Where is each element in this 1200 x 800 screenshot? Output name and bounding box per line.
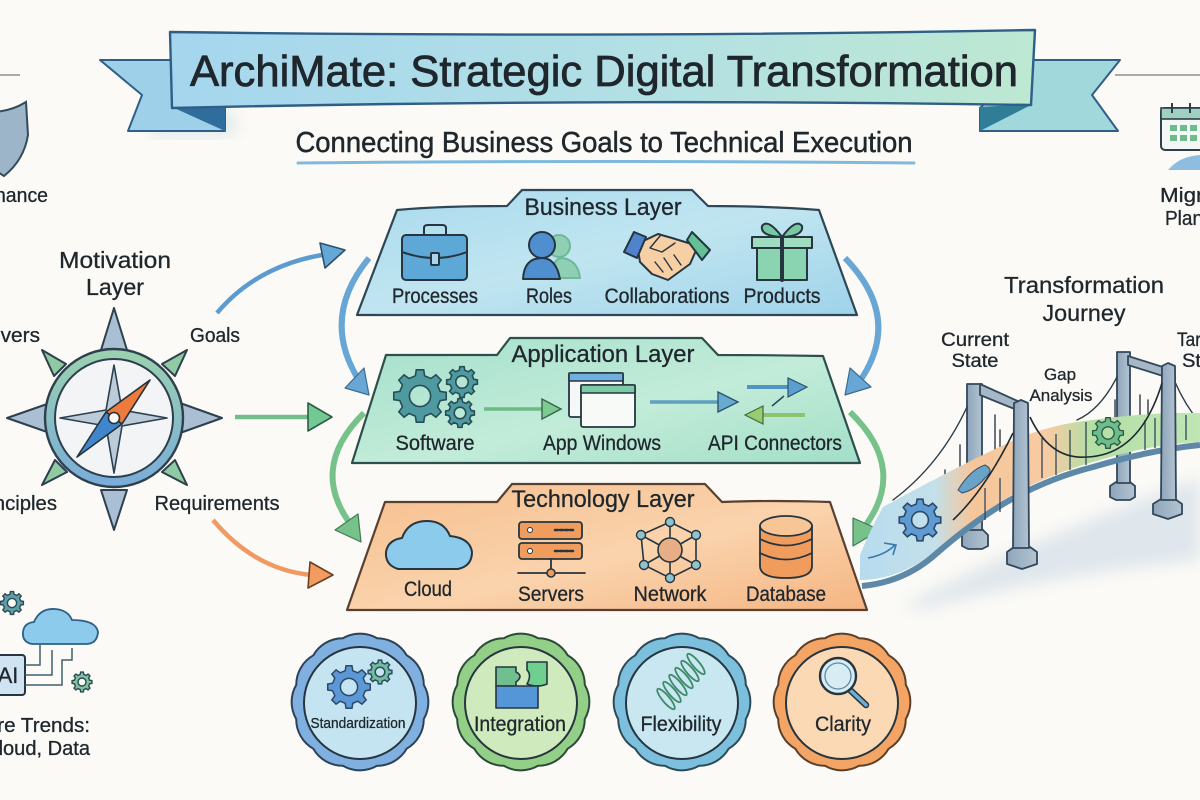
icon: compass bbox=[7, 308, 222, 530]
business labels: Products bbox=[744, 285, 820, 308]
journey heading bbox=[1004, 272, 1164, 326]
back suspension cables bbox=[893, 377, 1200, 525]
banner fold right bbox=[980, 104, 1033, 131]
label: gap analysis: Gap bbox=[1044, 365, 1076, 384]
front towers bbox=[1007, 363, 1182, 569]
panel: migration planning (cropped, top right) bbox=[1160, 103, 1200, 230]
label: current state: Current bbox=[941, 330, 1010, 351]
panel: governance (cropped, top left) bbox=[0, 102, 48, 207]
panel: motivation layer bbox=[0, 247, 280, 530]
banner fold left bbox=[172, 107, 225, 131]
panel: business layer bbox=[357, 190, 857, 315]
icon: shield bbox=[0, 102, 28, 176]
application labels: API Connectors bbox=[708, 432, 842, 455]
icon: app windows bbox=[569, 373, 635, 427]
label: current state bbox=[941, 330, 1010, 372]
journey heading: Transformation bbox=[1004, 272, 1164, 298]
integration label: Integration bbox=[474, 713, 566, 736]
icon: cloud bbox=[386, 521, 472, 569]
technology labels: Network bbox=[634, 583, 707, 606]
motivation heading: Motivation bbox=[59, 247, 171, 273]
arrow: windows to connectors bbox=[650, 392, 738, 412]
icon: gear right bbox=[72, 672, 92, 692]
application labels: App Windows bbox=[543, 432, 661, 455]
business layer heading: Business Layer bbox=[524, 194, 682, 221]
icon: network bbox=[636, 518, 700, 582]
bridge deck bbox=[860, 413, 1200, 580]
badge: standardization bbox=[278, 620, 442, 784]
icon: servers bbox=[518, 522, 585, 577]
flexibility label: Flexibility bbox=[640, 713, 722, 736]
deck edge bbox=[862, 445, 1200, 586]
arrow: motivation to application bbox=[235, 403, 332, 431]
motivation heading bbox=[59, 247, 171, 300]
badge: clarity bbox=[760, 620, 924, 784]
label: current state: State bbox=[952, 351, 998, 372]
label: target state bbox=[1177, 330, 1200, 372]
icon: standardization gears bbox=[328, 660, 392, 708]
icon: gift bbox=[752, 224, 812, 280]
icon: small gear bbox=[1, 592, 23, 614]
icon: api connectors bbox=[745, 378, 807, 424]
icon: database bbox=[760, 516, 812, 578]
application labels bbox=[396, 432, 842, 455]
application layer shape bbox=[352, 338, 860, 463]
back towers bbox=[962, 352, 1135, 549]
arrow: business to application left bbox=[342, 258, 369, 395]
technology labels: Servers bbox=[518, 583, 584, 606]
business layer shape bbox=[357, 190, 857, 315]
icon: briefcase bbox=[402, 225, 467, 280]
panel: application layer bbox=[352, 338, 860, 463]
arrow: software to windows bbox=[484, 399, 561, 419]
technology labels: Database bbox=[746, 583, 826, 606]
front suspension cables bbox=[953, 383, 1162, 520]
label: gap analysis: Analysis bbox=[1030, 386, 1092, 405]
arrow: requirements to technology bbox=[213, 520, 333, 588]
arrow: application to technology right bbox=[850, 412, 883, 546]
arrow: business to application right bbox=[845, 258, 878, 395]
icon: circuit lines bbox=[25, 645, 72, 685]
icon: gears bbox=[394, 367, 477, 427]
technology labels: Cloud bbox=[404, 578, 452, 601]
icon: road patch bbox=[958, 465, 990, 493]
business labels: Processes bbox=[392, 285, 478, 308]
technology labels bbox=[404, 578, 826, 606]
application layer heading: Application Layer bbox=[512, 341, 694, 368]
subtitle: Connecting Business Goals to Technical Execution bbox=[296, 127, 912, 159]
badge: flexibility bbox=[600, 620, 764, 784]
technology layer heading: Technology Layer bbox=[512, 486, 695, 513]
standardization label: Standardization bbox=[310, 715, 406, 732]
panel: transformation journey bridge bbox=[860, 272, 1200, 610]
icon: calendar bbox=[1161, 103, 1200, 150]
label: goals: Goals bbox=[190, 325, 240, 347]
title banner bbox=[100, 30, 1120, 135]
motivation heading: Layer bbox=[86, 274, 144, 300]
icon: roles bbox=[523, 232, 580, 279]
migration arc bbox=[1168, 155, 1200, 170]
icon: ai chip bbox=[0, 655, 25, 695]
application labels: Software bbox=[396, 432, 474, 455]
title text: ArchiMate: Strategic Digital Transformation bbox=[190, 47, 1018, 96]
journey heading: Journey bbox=[1042, 300, 1126, 326]
icon: road gear blue bbox=[899, 499, 941, 541]
icon: spring bbox=[655, 652, 707, 711]
icon: handshake bbox=[624, 232, 710, 280]
clarity label: Clarity bbox=[815, 713, 871, 736]
technology layer shape bbox=[347, 484, 867, 610]
panel: technology layer bbox=[347, 484, 867, 610]
icon: road gear green bbox=[1093, 418, 1123, 448]
future trends label bbox=[0, 715, 91, 760]
tower beams bbox=[980, 356, 1166, 412]
icon: road arrow bbox=[868, 543, 896, 558]
arrow: application to technology left bbox=[333, 413, 364, 542]
arrow: goals to business bbox=[217, 243, 345, 313]
icon: cloud bbox=[23, 609, 98, 644]
banner main ribbon bbox=[170, 30, 1035, 108]
label: requirements: Requirements bbox=[154, 493, 280, 515]
icon: puzzle bbox=[496, 662, 547, 708]
business labels: Roles bbox=[526, 285, 572, 308]
banner left tail bbox=[100, 60, 225, 131]
badge: integration bbox=[439, 620, 603, 784]
deck hangers bbox=[985, 415, 1186, 520]
label: gap analysis bbox=[1030, 365, 1092, 405]
business labels bbox=[392, 285, 820, 308]
bridge ground shadow bbox=[905, 478, 1200, 610]
business labels: Collaborations bbox=[604, 285, 730, 308]
icon: magnifier bbox=[820, 658, 866, 705]
panel: future trends (cropped, bottom left) bbox=[0, 592, 98, 760]
banner right tail bbox=[980, 60, 1120, 131]
